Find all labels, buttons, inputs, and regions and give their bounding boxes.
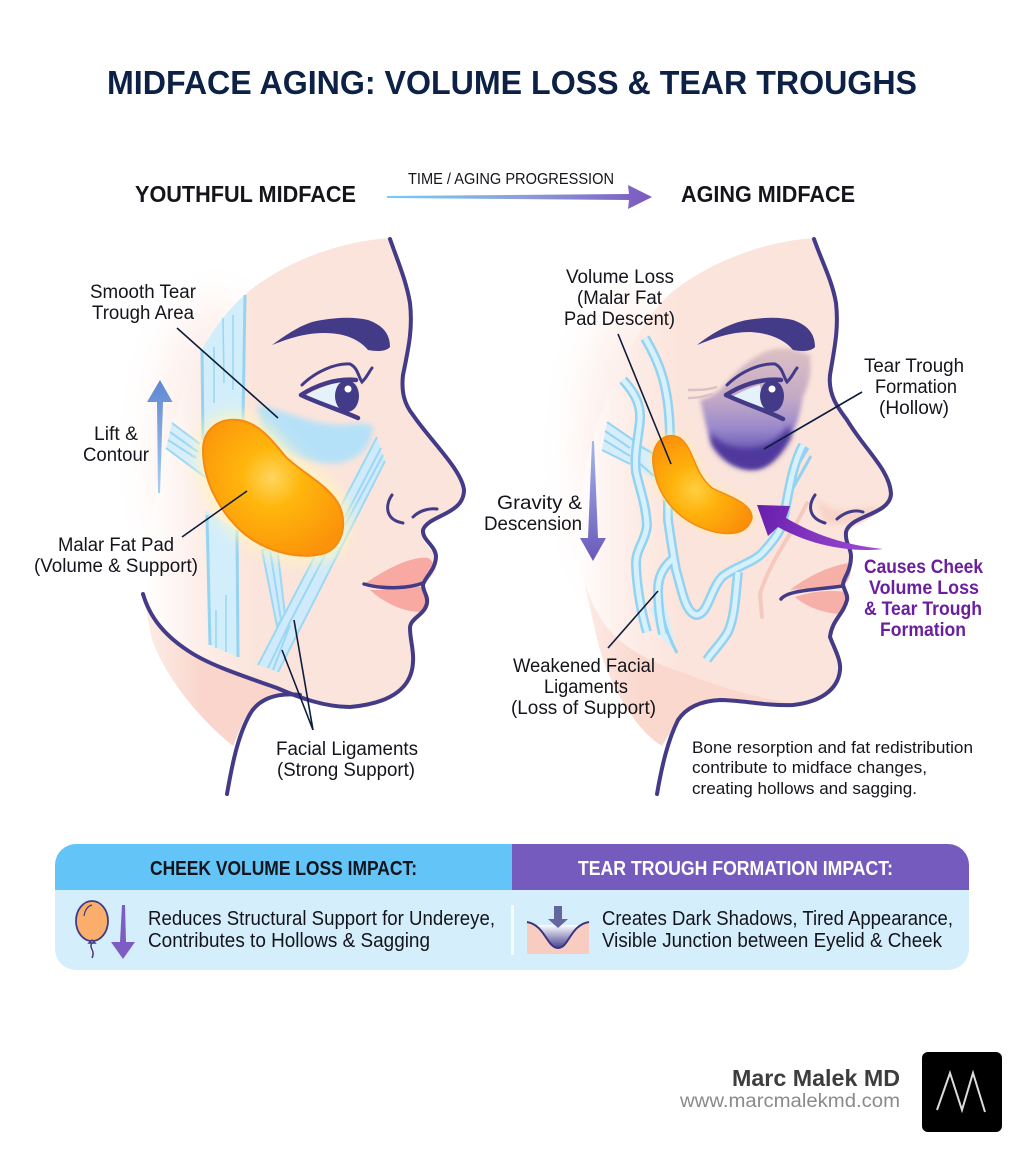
ligaments: vertical band	[202, 295, 245, 657]
ligaments: small lateral band	[166, 423, 205, 477]
brow	[697, 318, 815, 351]
label: malar fat pad: Malar Fat Pad	[58, 535, 174, 556]
label: smooth tear trough: Trough Area	[92, 303, 194, 324]
callout: causes: Causes Cheek	[864, 557, 983, 578]
callout: causes: Volume Loss	[869, 578, 979, 599]
callout: causes: Formation	[880, 620, 966, 641]
tear trough impact text: Visible Junction between Eyelid & Cheek	[602, 930, 943, 952]
label: smooth tear trough	[90, 282, 197, 324]
label: gravity and descension	[484, 493, 582, 535]
heading: cheek volume loss impact: CHEEK VOLUME LOSS IMPACT:	[150, 858, 417, 880]
fat pad glow	[653, 436, 752, 533]
leader lines	[177, 328, 862, 730]
text block: bone resorption	[692, 739, 973, 798]
bruised tear trough hollow	[689, 348, 811, 469]
nasolabial fold	[760, 503, 807, 617]
face outline	[143, 239, 464, 707]
descended malar fat pad	[653, 436, 752, 533]
label: tear trough formation: (Hollow)	[879, 398, 949, 419]
title: MIDFACE AGING: VOLUME LOSS & TEAR TROUGHS	[107, 64, 917, 101]
brow	[272, 318, 390, 351]
jaw shadow	[582, 572, 800, 746]
label: weakened ligaments: Weakened Facial	[513, 656, 655, 677]
label: malar fat pad: (Volume & Support)	[34, 556, 198, 577]
nostril	[388, 495, 437, 523]
neck outline	[227, 694, 300, 794]
face outline and neck	[657, 239, 891, 794]
text block: bone resorption: contribute to midface changes,	[692, 759, 927, 777]
face skin	[579, 238, 890, 705]
label: volume loss: Pad Descent)	[564, 309, 675, 330]
logo	[922, 1052, 1002, 1132]
ligaments: weakened ribbons	[623, 338, 811, 660]
label: lift and contour	[83, 424, 150, 466]
label: malar fat pad	[34, 535, 198, 577]
mouth line	[364, 583, 423, 588]
callout: causes	[864, 557, 983, 641]
eye	[301, 364, 372, 418]
ligaments: diagonal band	[258, 437, 385, 672]
icon: tear trough	[527, 906, 589, 954]
neck and jaw shadow	[143, 594, 285, 746]
heading: youthful midface: YOUTHFUL MIDFACE	[135, 181, 356, 207]
label: weakened ligaments: Ligaments	[544, 677, 628, 698]
arrow: lift	[147, 380, 172, 493]
label: tear trough formation	[864, 356, 964, 419]
label: facial ligaments: Facial Ligaments	[276, 739, 418, 760]
label: lift and contour: Contour	[83, 445, 150, 466]
cheek impact text	[148, 908, 495, 952]
arrow: gravity	[580, 441, 606, 561]
label: weakened ligaments	[511, 656, 656, 719]
ligaments: lateral band	[602, 422, 656, 482]
fat pad glow	[198, 415, 349, 561]
panel: youthful face illustration	[143, 238, 464, 794]
label: gravity and descension: Gravity &	[497, 493, 582, 514]
label: tear trough formation: Tear Trough	[864, 356, 964, 377]
panel: aging face illustration	[579, 238, 891, 794]
heading: tear trough formation impact: TEAR TROUGH FORMATION IMPACT:	[578, 858, 893, 880]
malar fat pad	[203, 420, 343, 556]
label: tear trough formation: Formation	[875, 377, 957, 398]
tear trough impact text	[602, 908, 953, 952]
mouth line	[781, 586, 843, 599]
progression label: TIME / AGING PROGRESSION	[408, 171, 614, 188]
label: gravity and descension: Descension	[484, 514, 582, 535]
panel: impact banner	[55, 844, 969, 970]
cheek impact text: Contributes to Hollows & Sagging	[148, 930, 430, 952]
banner backgrounds	[55, 844, 969, 970]
cheek impact text: Reduces Structural Support for Undereye,	[148, 908, 495, 930]
text block: bone resorption: Bone resorption and fat redistribution	[692, 739, 973, 757]
nostril	[811, 495, 863, 523]
nose shade	[812, 492, 880, 524]
ligaments: lower short band	[262, 546, 285, 626]
tear trough impact text: Creates Dark Shadows, Tired Appearance,	[602, 908, 953, 930]
icon: down arrow	[111, 905, 135, 959]
arrow: time progression	[387, 185, 652, 209]
lips	[364, 558, 433, 612]
icon: balloon	[76, 901, 108, 958]
footer: name: Marc Malek MD	[732, 1065, 900, 1091]
label: volume loss: (Malar Fat	[577, 288, 663, 309]
face skin	[143, 238, 464, 706]
text block: bone resorption: creating hollows and sagging.	[692, 780, 917, 798]
label: weakened ligaments: (Loss of Support)	[511, 698, 656, 719]
lips	[790, 563, 851, 614]
arrow: causes	[757, 505, 883, 550]
eye	[726, 364, 797, 419]
label: facial ligaments	[276, 739, 418, 781]
label: smooth tear trough: Smooth Tear	[90, 282, 197, 303]
footer: website: www.marcmalekmd.com	[679, 1091, 900, 1112]
smooth tear trough highlight	[257, 405, 373, 463]
callout: causes: & Tear Trough	[864, 599, 982, 620]
label: facial ligaments: (Strong Support)	[277, 760, 415, 781]
heading: aging midface: AGING MIDFACE	[681, 181, 855, 207]
label: volume loss: Volume Loss	[566, 267, 674, 288]
label: lift and contour: Lift &	[94, 424, 138, 445]
label: volume loss	[564, 267, 675, 330]
